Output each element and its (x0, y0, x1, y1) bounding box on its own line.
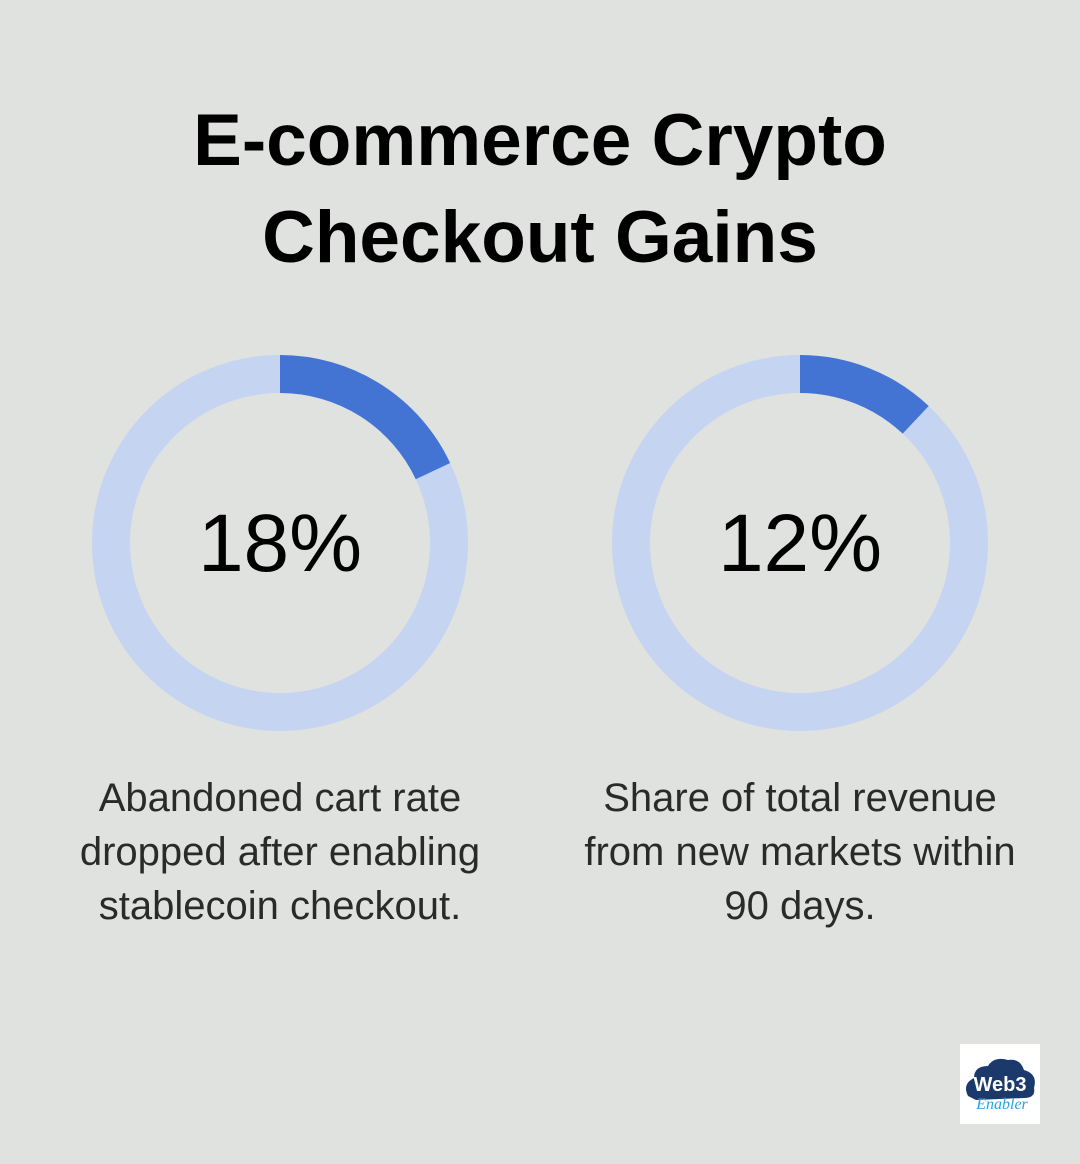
logo: Web3 Enabler: Web3 (974, 1074, 1026, 1096)
text: left description (80, 776, 480, 928)
text: right description: from new markets within (584, 830, 1016, 874)
donut chart: 18%: 18% (198, 498, 362, 589)
logo: Web3 Enabler (960, 1044, 1040, 1124)
title: E-commerce Crypto (193, 100, 887, 181)
text: left description: dropped after enabling (80, 830, 480, 874)
donut chart: 12% (612, 355, 988, 731)
text: right description: 90 days. (724, 884, 876, 928)
title: Checkout Gains (262, 197, 818, 278)
donut chart: 18% (92, 355, 468, 731)
text: left description: stablecoin checkout. (99, 884, 461, 928)
text: left description: Abandoned cart rate (99, 776, 461, 820)
logo: Web3 Enabler: Enabler (975, 1096, 1029, 1113)
text: right description: Share of total revenue (603, 776, 997, 820)
text: right description (584, 776, 1016, 928)
title (193, 100, 887, 278)
donut chart: 12%: 12% (718, 498, 882, 589)
